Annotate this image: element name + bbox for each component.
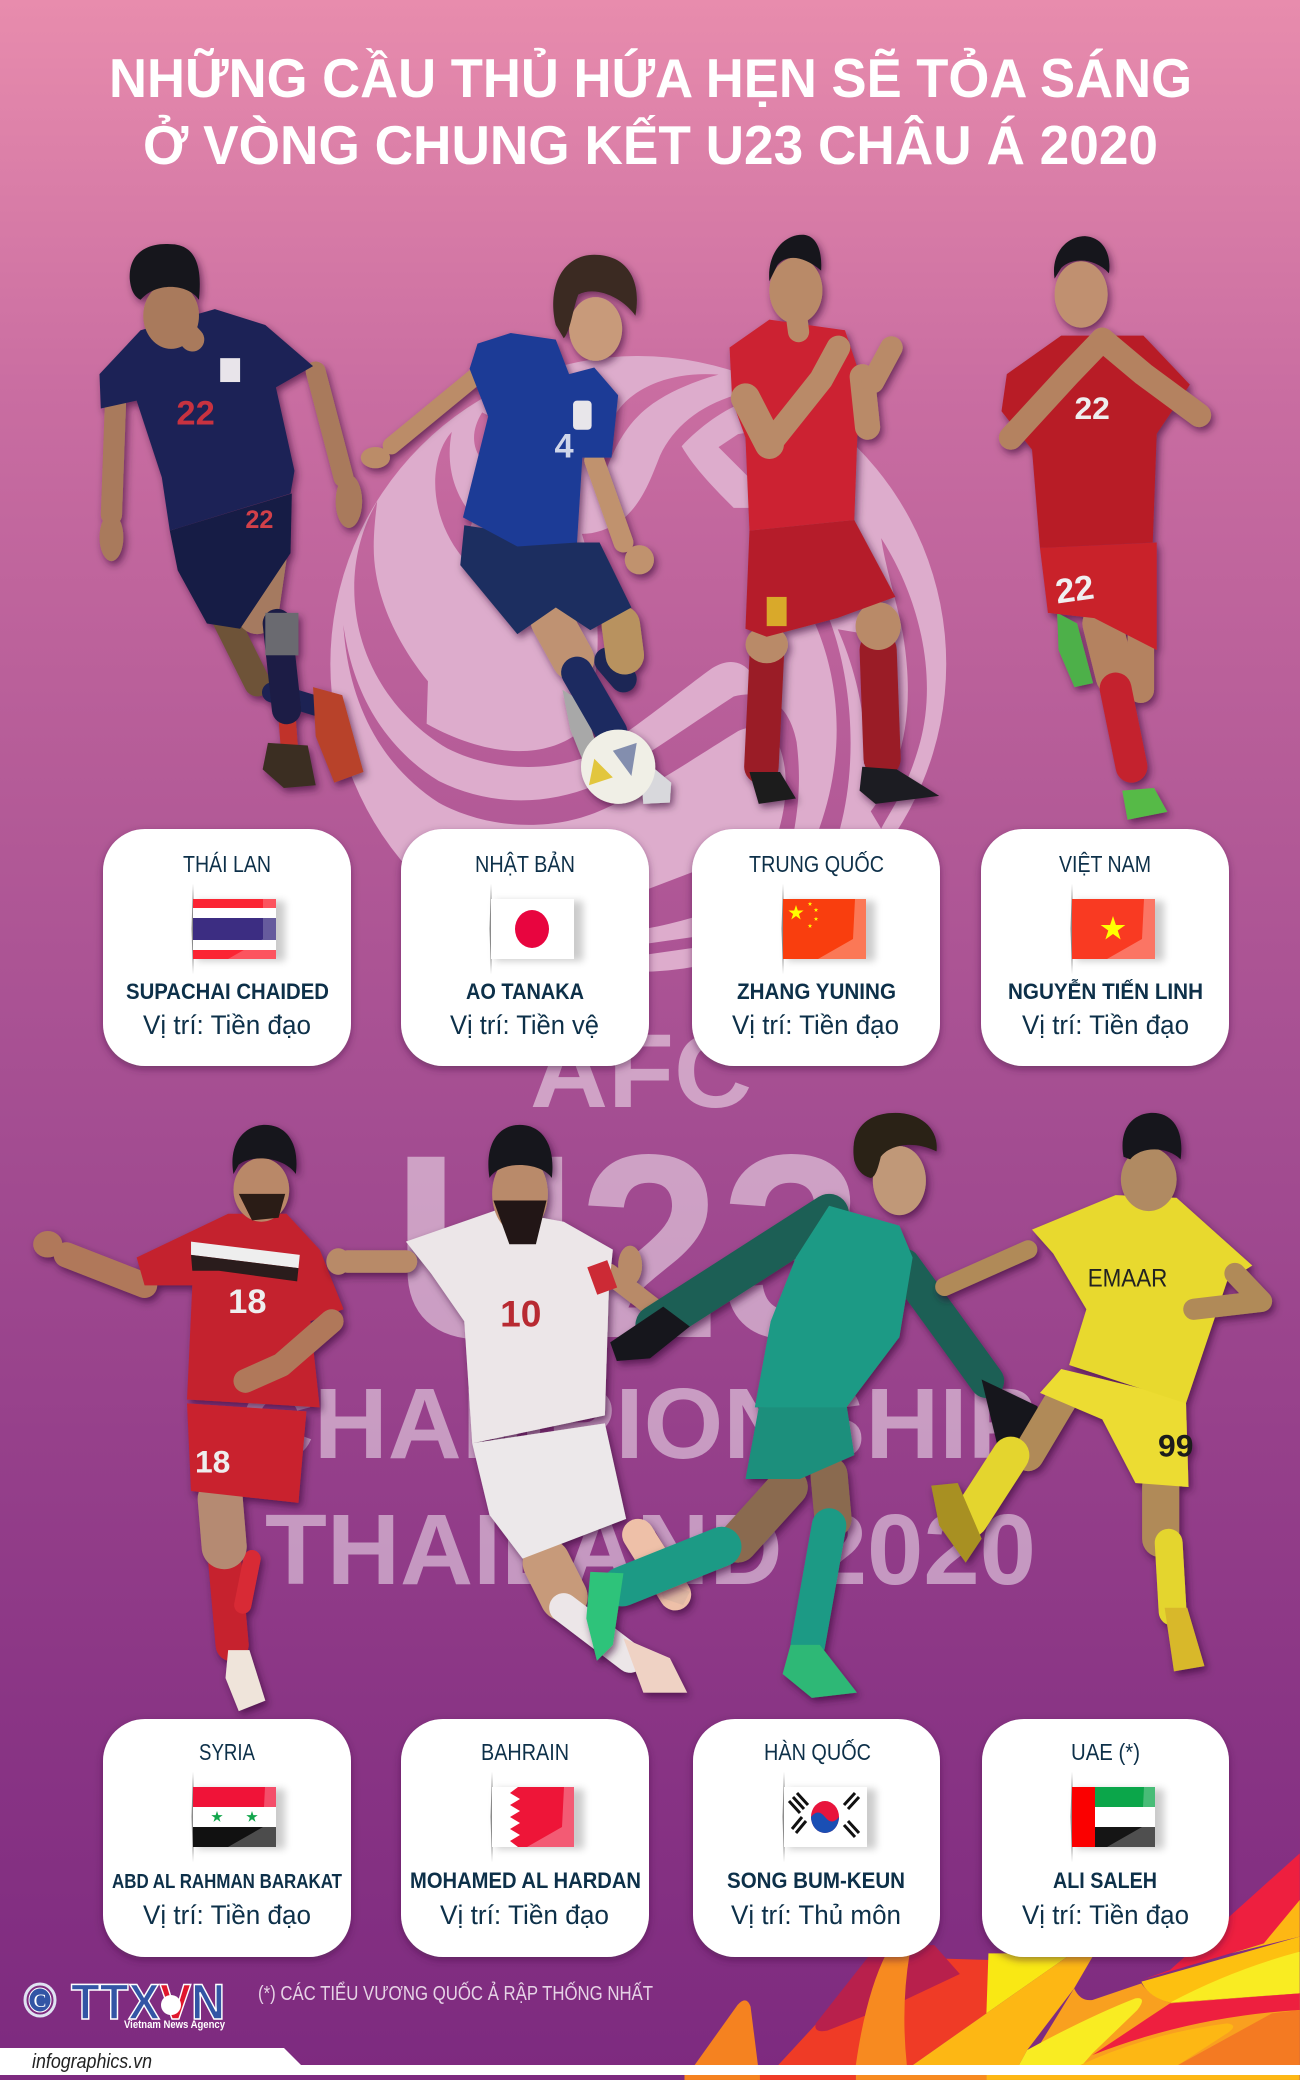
- position: Vị trí: Tiền đạo: [143, 1900, 311, 1930]
- player: Japan, Ao Tanaka: [361, 255, 671, 804]
- country name: VIỆT NAM: [1059, 851, 1151, 877]
- card: Vietnam: [981, 829, 1229, 1066]
- player: Thailand, Supachai Chaided: [99, 244, 363, 788]
- player: Vietnam, Nguyễn Tiến Linh: 22: [1053, 569, 1096, 611]
- flag: Syria: [192, 1772, 285, 1862]
- player name: ALI SALEH: [1053, 1868, 1157, 1893]
- player: Syria, Abd Al Rahman Barakat: 18: [228, 1283, 267, 1321]
- player name: ZHANG YUNING: [737, 979, 896, 1004]
- player: Thailand, Supachai Chaided: 22: [245, 506, 273, 534]
- position: Vị trí: Tiền vệ: [450, 1010, 599, 1040]
- flag: Thailand: [192, 884, 285, 974]
- flame decoration: [684, 1853, 1300, 2080]
- country name: HÀN QUỐC: [764, 1738, 871, 1765]
- player name: SUPACHAI CHAIDED: [126, 979, 329, 1004]
- copyright icon: C: [34, 1991, 46, 2012]
- player name: ABD AL RAHMAN BARAKAT: [112, 1871, 342, 1893]
- player: UAE, Ali Saleh: EMAAR: [1088, 1265, 1167, 1293]
- watermark: CHAMPIONSHIP: CHAMPIONSHIP: [240, 1368, 1036, 1480]
- card: UAE: [982, 1719, 1229, 1957]
- player: Bahrain, Mohamed Al Hardan: 10: [500, 1292, 541, 1334]
- player photos: [33, 235, 1262, 1711]
- position: Vị trí: Tiền đạo: [1022, 1010, 1189, 1040]
- flag: South Korea: [782, 1772, 876, 1862]
- footer bar: [0, 2048, 1300, 2075]
- player: Japan, Ao Tanaka: 4: [554, 428, 574, 466]
- card: China: [692, 829, 940, 1066]
- flag: China: [782, 884, 875, 974]
- player: Syria, Abd Al Rahman Barakat: [33, 1125, 344, 1711]
- player: Bahrain, Mohamed Al Hardan: [326, 1125, 690, 1693]
- position: Vị trí: Tiền đạo: [143, 1010, 311, 1040]
- position: Vị trí: Tiền đạo: [440, 1900, 609, 1930]
- country name: UAE (*): [1071, 1739, 1140, 1765]
- player: Thailand, Supachai Chaided: 22: [176, 394, 215, 432]
- flag: Bahrain: [490, 1772, 584, 1862]
- card: Japan: [401, 829, 649, 1066]
- player: South Korea, Song Bum-keun: [586, 1113, 1043, 1698]
- player: UAE, Ali Saleh: 99: [1158, 1427, 1193, 1463]
- flag: Japan: [490, 884, 583, 974]
- country name: BAHRAIN: [481, 1739, 569, 1765]
- footnote: (*) CÁC TIỂU VƯƠNG QUỐC Ả RẬP THỐNG NHẤT: [258, 1981, 653, 2005]
- player: Syria, Abd Al Rahman Barakat: 18: [195, 1443, 230, 1479]
- country name: THÁI LAN: [183, 851, 271, 877]
- website label: infographics.vn: [32, 2051, 152, 2073]
- player: UAE, Ali Saleh: [931, 1113, 1262, 1671]
- card: Bahrain: [401, 1719, 649, 1957]
- copyright icon: [25, 1984, 55, 2016]
- title: Ở VÒNG CHUNG KẾT U23 CHÂU Á 2020: [143, 114, 1158, 176]
- title: NHỮNG CẦU THỦ HỨA HẸN SẼ TỎA SÁNG: [109, 47, 1192, 109]
- player: Vietnam, Nguyễn Tiến Linh: 22: [1074, 390, 1110, 426]
- watermark: THAILAND 2020: THAILAND 2020: [265, 1494, 1036, 1606]
- watermark: U23: U23: [392, 1100, 864, 1393]
- position: Vị trí: Thủ môn: [731, 1900, 901, 1930]
- country name: TRUNG QUỐC: [749, 850, 884, 877]
- flag: UAE: [1070, 1772, 1164, 1862]
- flag: Vietnam: [1070, 884, 1164, 974]
- player name: MOHAMED AL HARDAN: [410, 1868, 641, 1893]
- title: [109, 47, 1192, 176]
- player name: SONG BUM-KEUN: [727, 1868, 905, 1893]
- position: Vị trí: Tiền đạo: [1022, 1900, 1189, 1930]
- player: Vietnam, Nguyễn Tiến Linh: [1002, 236, 1199, 820]
- AFC ball logo watermark: [330, 356, 946, 972]
- card: Thailand: [103, 829, 351, 1066]
- country name: NHẬT BẢN: [475, 849, 575, 877]
- TTXVN logo: TTXVN: [71, 1974, 225, 2030]
- position: Vị trí: Tiền đạo: [732, 1010, 899, 1040]
- player: China, Zhang Yuning: [730, 235, 939, 804]
- watermark: AFC: AFC: [530, 1013, 752, 1130]
- TTXVN logo: Vietnam News Agency: [124, 2019, 226, 2031]
- card: South Korea: [693, 1719, 940, 1957]
- card: Syria: [103, 1719, 351, 1957]
- player name: NGUYỄN TIẾN LINH: [1008, 978, 1203, 1004]
- player name: AO TANAKA: [466, 979, 584, 1004]
- country name: SYRIA: [199, 1739, 256, 1765]
